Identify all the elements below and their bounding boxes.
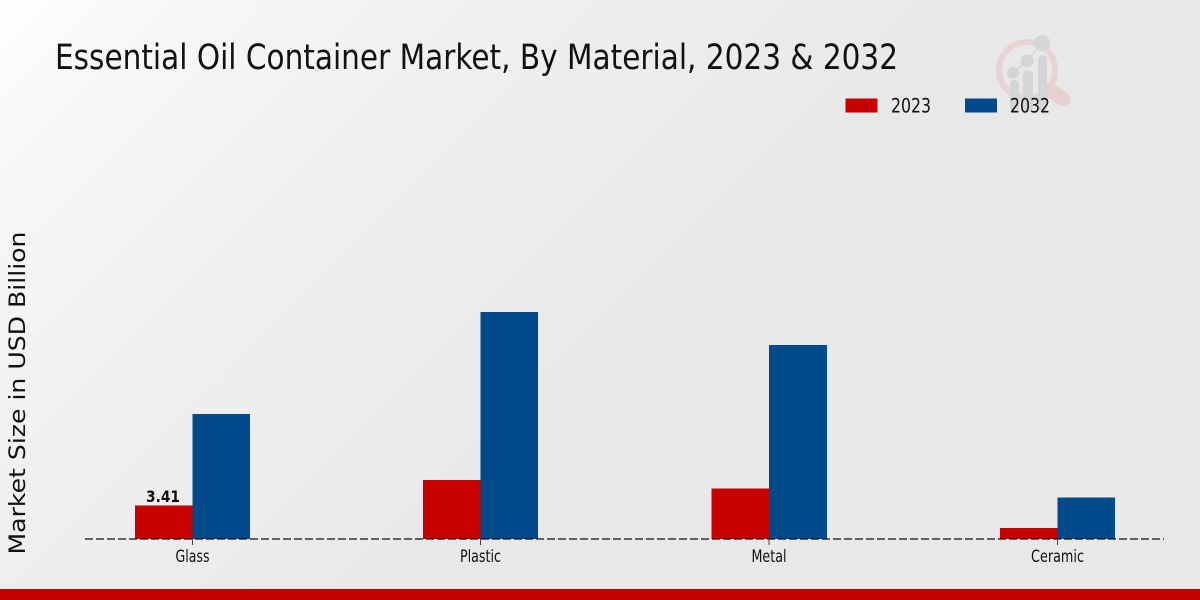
y axis label: Market Size in USD Billion: [5, 232, 31, 554]
x axis baseline: [85, 538, 1164, 540]
legend: [846, 94, 1050, 118]
legend item: 2032: 2032: [1010, 94, 1050, 118]
title: Essential Oil Container Market, By Material, 2023 & 2032: [55, 38, 898, 78]
category label: Plastic: Plastic: [460, 547, 501, 566]
category label: Glass: Glass: [176, 547, 210, 566]
bars: Glass: [135, 414, 250, 539]
legend item: 2023: 2023: [891, 94, 931, 118]
bars: Ceramic: [1000, 498, 1115, 539]
bars: Plastic: [423, 312, 538, 539]
legend item: 2023: [846, 94, 931, 118]
legend item: 2032: [965, 94, 1050, 118]
footer bar: [0, 589, 1200, 600]
bar chart: [85, 312, 1164, 566]
bars: Metal: [712, 345, 827, 539]
category label: Ceramic: Ceramic: [1031, 547, 1084, 566]
icon: watermark logo: [999, 35, 1063, 112]
category label: Metal: Metal: [752, 547, 786, 566]
data label: 3.41: 3.41: [146, 487, 180, 506]
